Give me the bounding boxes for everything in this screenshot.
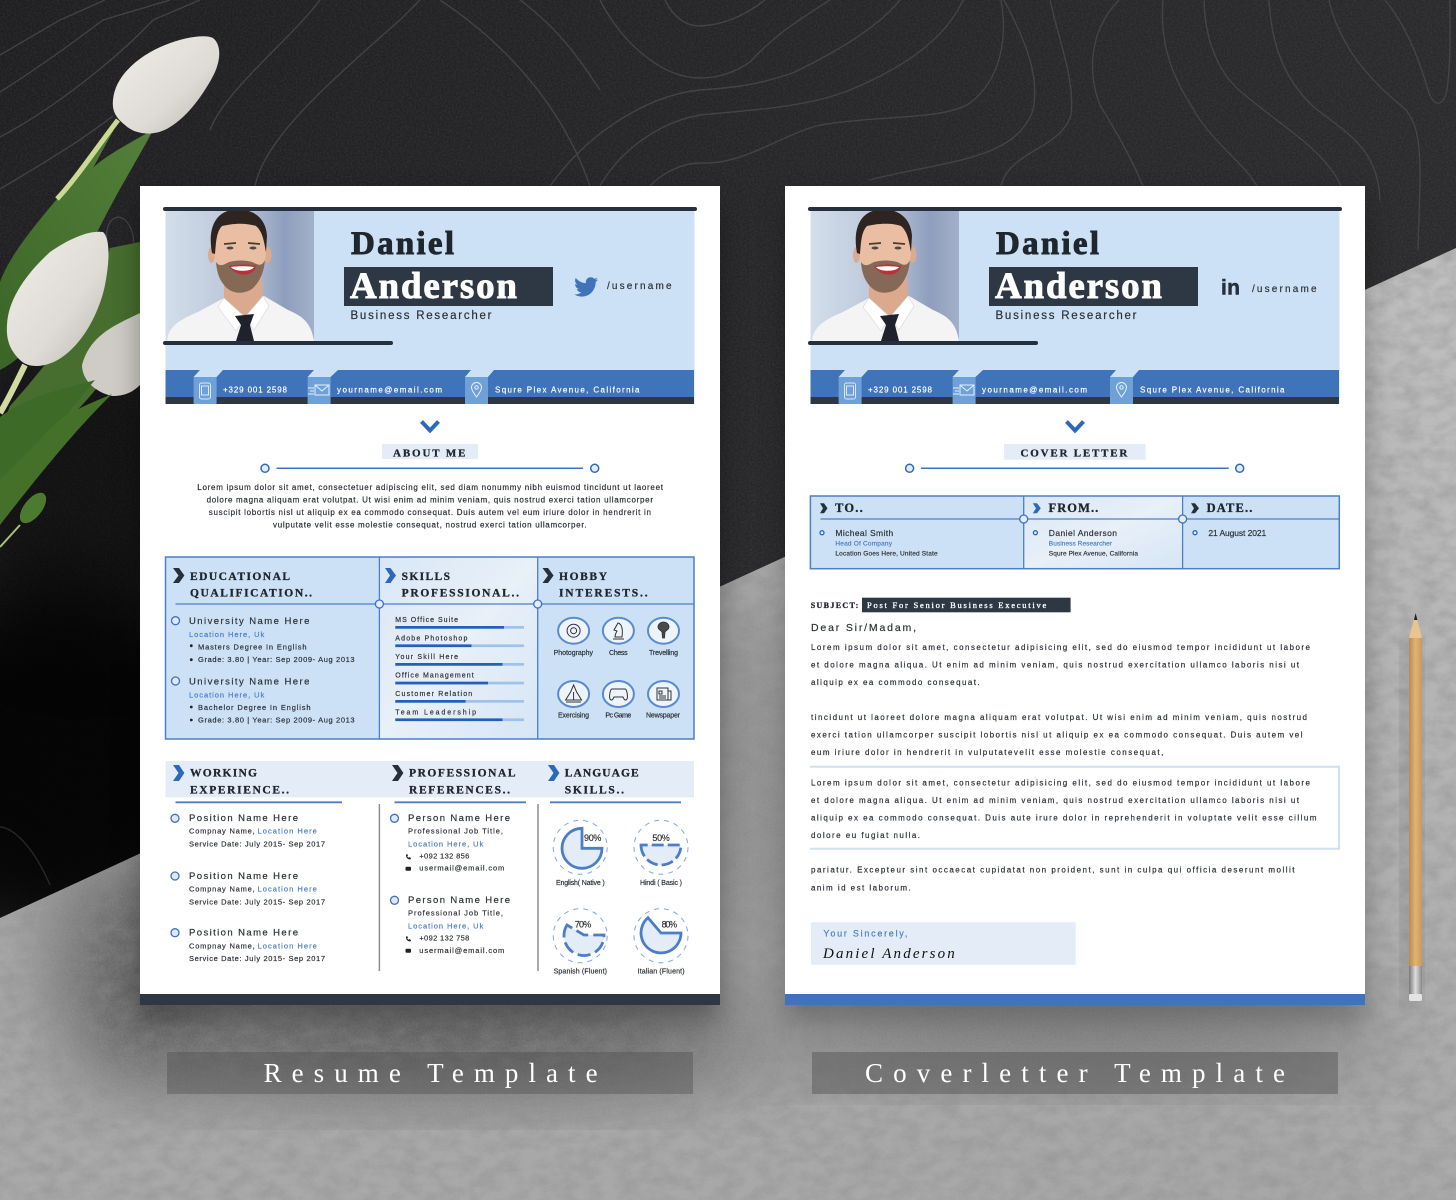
caption: resume template: Resume Template — [264, 1058, 598, 1088]
column: to: Head Of Company — [835, 541, 893, 548]
gauge: english 90%: English( Native ) — [556, 880, 605, 887]
section heading: skills: SKILLS — [402, 571, 450, 583]
job entry 3: Location Here — [258, 941, 317, 950]
about me paragraph: suscipit lobortis nisl ut aliquip ex ea commodo consequat. Duis autem vel eum iriure dolor in hendrerit in — [209, 508, 651, 517]
caption: resume template — [167, 1052, 693, 1094]
job entry 1: Compnay Name, — [189, 827, 255, 836]
contact ribbon — [166, 370, 694, 404]
paragraph 2: eum iriure dolor in hendrerit in vulputatevelit esse molestie consequat, — [811, 748, 1163, 757]
column: educational qualification — [172, 568, 355, 724]
column: from: Daniel Anderson — [1049, 528, 1117, 538]
icon: mail — [953, 385, 974, 395]
job title: Business Researcher — [996, 310, 1137, 322]
column: to — [820, 501, 938, 557]
job entry 2 — [171, 871, 325, 906]
heading: about me: ABOUT ME — [393, 448, 466, 460]
column: working experience — [171, 765, 325, 963]
about me section — [197, 422, 664, 530]
hobby: exercising — [558, 681, 589, 720]
column: date: DATE.. — [1207, 501, 1252, 515]
gauge: hindi 50%: 50% — [652, 833, 670, 843]
gauge: spanish 70%: 70% — [575, 920, 591, 930]
about me paragraph: dolore magna aliquam erat volutpat. Ut wisi enim ad minim veniam, quis nostrud exerci tation ullamcorper — [207, 495, 653, 504]
contact ribbon — [810, 370, 1339, 404]
education entry 2: Location Here, Uk — [189, 690, 265, 699]
gauge: spanish 70%: Spanish (Fluent) — [554, 968, 607, 975]
hobby: exercising: Exercising — [558, 713, 589, 720]
portrait photo — [166, 209, 314, 341]
divider with end nodes — [261, 464, 599, 472]
job entry 3 — [171, 928, 325, 963]
hobby: travelling — [648, 618, 679, 657]
social handle: /username — [607, 281, 672, 292]
section heading: education: QUALIFICATION.. — [190, 588, 312, 600]
job entry 1: Service Date: July 2015- Sep 2017 — [189, 839, 325, 848]
paragraph 2 — [811, 713, 1307, 757]
column: to: Location Goes Here, United State — [835, 550, 938, 557]
column: date — [1191, 501, 1266, 538]
gauge: italian 80% — [634, 909, 688, 975]
icon: phone — [844, 383, 856, 399]
cover letter heading block — [906, 422, 1244, 472]
job entry 3: Position Name Here — [189, 928, 298, 939]
paragraph 4: anim id est laborum. — [811, 883, 911, 892]
column: from: Squre Plex Avenue, California — [1049, 550, 1138, 557]
reference entry 1: Person Name Here — [408, 813, 510, 824]
education entry 1: Grade: 3.80 | Year: Sep 2009- Aug 2013 — [198, 655, 355, 664]
education entry 1: University Name Here — [189, 616, 309, 627]
reference entry 1: Location Here, Uk — [408, 839, 484, 848]
job entry 3: Compnay Name, — [189, 941, 255, 950]
job entry 1: Location Here — [258, 827, 317, 836]
highlighted paragraph: dolore eu fugiat nulla. — [811, 831, 920, 840]
icon: location pin — [472, 382, 482, 397]
hobby: newspaper — [646, 681, 681, 720]
pencil — [1404, 613, 1422, 1001]
reference entry 1: Professional Job Title, — [408, 827, 503, 836]
section heading: references — [392, 765, 516, 796]
highlighted paragraph: aliquip ex ea commodo consequat. Duis aute irure dolor in reprehenderit in voluptate velit esse cillum — [811, 813, 1317, 822]
paragraph 1 — [811, 643, 1311, 687]
caption: coverletter template — [812, 1052, 1338, 1094]
skill bars: MS Office Suite — [395, 617, 458, 624]
education entry 1: Location Here, Uk — [189, 630, 265, 639]
hobby: travelling: Trevelling — [649, 650, 678, 657]
section heading: hobbies: HOBBY — [559, 571, 608, 583]
skill bars: Customer Relation — [395, 691, 472, 698]
education entry 2 — [172, 677, 355, 724]
social handle: /username — [1252, 284, 1317, 295]
job entry 1: Position Name Here — [189, 813, 298, 824]
column: professional skills — [385, 568, 524, 721]
section heading: education — [173, 568, 312, 600]
about me paragraph: Lorem ipsum dolor sit amet, consectetuer adipiscing elit, sed diam nonummy nibh euismod tincidunt ut laoreet — [197, 483, 664, 492]
name box: Anderson: Anderson — [350, 266, 517, 307]
address: Squre Plex Avenue, California — [495, 386, 640, 394]
paragraph 2: tincidunt ut laoreet dolore magna aliquam erat volutpat. Ut wisi enim ad minim veniam, quis nostrud — [811, 713, 1307, 722]
resume footer strip — [140, 994, 720, 1005]
gauge: spanish 70% — [553, 909, 607, 975]
heading: about me — [382, 444, 478, 460]
job entry 1 — [171, 813, 325, 848]
reference entry 1 — [390, 813, 510, 873]
column: hobby interests — [542, 568, 681, 720]
section heading: hobbies: INTERESTS.. — [559, 588, 648, 600]
icon: location pin — [1116, 382, 1126, 397]
subject line: Post For Senior Business Executive — [867, 600, 1047, 610]
signature block — [811, 922, 1076, 965]
education entry 1: Masters Degree In English — [198, 642, 306, 651]
cover letter header — [808, 207, 1342, 404]
job title: Business Researcher — [350, 310, 492, 322]
skill bars — [395, 617, 524, 721]
divider with end nodes — [906, 464, 1244, 472]
cover letter footer strip — [785, 994, 1365, 1005]
icon: chevron down — [422, 422, 438, 430]
gauge: english 90%: 90% — [584, 833, 601, 843]
paragraph 1: et dolore magna aliqua. Ut enim ad minim veniam, quis nostrud exercitation ullamco laboris nisi ut — [811, 661, 1300, 670]
job entry 2: Position Name Here — [189, 871, 298, 882]
name: Daniel: Daniel — [351, 226, 454, 262]
hobby: photography — [554, 618, 594, 657]
column: to: Micheal Smith — [835, 528, 893, 538]
section heading: references: REFERENCES.. — [409, 784, 510, 796]
hobby: chess — [603, 618, 634, 657]
icon: phone — [200, 383, 210, 399]
section heading: references: PROFESSIONAL — [409, 768, 516, 780]
name box: Anderson: Anderson — [995, 266, 1162, 307]
column: to: TO.. — [835, 501, 863, 515]
gauge: italian 80%: Italian (Fluent) — [638, 968, 685, 975]
phone number: +329 001 2598 — [868, 386, 933, 394]
education entry 2: Bachelor Degree In English — [198, 703, 310, 712]
section heading: skills: PROFESSIONAL.. — [402, 588, 519, 600]
section heading: education: EDUCATIONAL — [190, 571, 290, 583]
section heading: hobbies — [542, 568, 648, 600]
column: professional references — [390, 765, 516, 955]
portrait photo — [811, 209, 959, 341]
phone number: +329 001 2598 — [223, 386, 288, 394]
reference entry 2: Person Name Here — [408, 895, 510, 906]
subject line — [811, 598, 1071, 612]
job entry 2: Service Date: July 2015- Sep 2017 — [189, 897, 325, 906]
skill bars: Office Management — [395, 673, 474, 680]
caption: coverletter template: Coverletter Template — [865, 1058, 1285, 1088]
section heading: experience: WORKING — [190, 768, 257, 780]
education entry 2: University Name Here — [189, 677, 309, 688]
highlighted paragraph: Lorem ipsum dolor sit amet, consectetur adipisicing elit, sed do eiusmod tempor incididunt ut labore — [811, 778, 1311, 787]
column: language skills — [548, 765, 688, 975]
signature block: Daniel Anderson — [822, 946, 955, 962]
page shadows — [140, 200, 1365, 1020]
background: grey concrete surface — [0, 248, 1456, 1200]
job entry 2: Compnay Name, — [189, 885, 255, 894]
paragraph 1: Lorem ipsum dolor sit amet, consectetur adipisicing elit, sed do eiusmod tempor incididunt ut labore — [811, 643, 1311, 652]
hobby: photography: Photography — [554, 650, 594, 657]
hobby: newspaper: Newspaper — [646, 713, 681, 720]
section heading: languages: LANGUAGE — [565, 768, 639, 780]
reference entry 2: usermail@email.com — [419, 946, 504, 955]
section heading: experience — [173, 765, 289, 796]
gauge: italian 80%: 80% — [662, 920, 677, 930]
panel: experience, references, languages — [166, 761, 694, 975]
salutation: Dear Sir/Madam, — [811, 622, 916, 634]
icon: mail — [308, 385, 329, 395]
section heading: skills — [385, 568, 519, 600]
gauge: hindi 50% — [634, 820, 688, 887]
email: yourname@email.com — [337, 386, 442, 394]
paragraph 2: exerci tation ullamcorper suscipit lobortis nisl ut aliquip ex ea commodo consequat. Duis autem vel — [811, 731, 1303, 740]
panel: education, skills, hobbies — [166, 557, 694, 739]
section heading: languages — [548, 765, 639, 796]
job entry 3: Service Date: July 2015- Sep 2017 — [189, 954, 325, 963]
reference entry 2: Professional Job Title, — [408, 909, 503, 918]
icon: twitter bird — [574, 277, 598, 297]
reference entry 1: +092 132 856 — [419, 851, 469, 860]
email: yourname@email.com — [982, 386, 1087, 394]
reference entry 2: Location Here, Uk — [408, 921, 484, 930]
reference entry 1: usermail@email.com — [419, 864, 504, 873]
section heading: languages: SKILLS.. — [565, 784, 624, 796]
signature block: Your Sincerely, — [823, 928, 907, 938]
icon: chevron down — [1066, 422, 1084, 430]
panel: resume page — [140, 186, 720, 1005]
education entry 1 — [172, 616, 355, 664]
reference entry 2 — [390, 895, 510, 955]
column: date: 21 August 2021 — [1208, 528, 1266, 538]
hobby: pc game — [603, 681, 634, 720]
gauge: hindi 50%: Hindi ( Basic ) — [640, 880, 682, 887]
subject line: SUBJECT: — [811, 601, 858, 610]
skill bars: Adobe Photoshop — [395, 635, 467, 642]
paragraph 1: aliquip ex ea commodo consequat. — [811, 678, 980, 687]
address: Squre Plex Avenue, California — [1140, 386, 1285, 394]
heading: cover letter — [1004, 444, 1146, 460]
section heading: experience: EXPERIENCE.. — [190, 784, 289, 796]
skill bars: Your Skill Here — [395, 654, 458, 661]
column: from: Business Researcher — [1049, 541, 1113, 548]
paragraph 4 — [811, 866, 1295, 892]
highlighted paragraph — [810, 767, 1339, 849]
education entry 2: Grade: 3.80 | Year: Sep 2009- Aug 2013 — [198, 715, 355, 724]
hobby: chess: Chess — [609, 650, 628, 657]
name: Daniel: Daniel — [996, 226, 1099, 262]
column: from: FROM.. — [1048, 501, 1098, 515]
resume header — [163, 207, 697, 404]
highlighted paragraph: et dolore magna aliqua. Ut enim ad minim veniam, quis nostrud exercitation ullamco laboris nisi ut — [811, 796, 1300, 805]
panel: cover letter page — [785, 186, 1365, 1005]
paragraph 4: pariatur. Excepteur sint occaecat cupidatat non proident, sunt in culpa qui officia deserunt mollit — [811, 866, 1295, 875]
skill bars: Team Leadership — [395, 710, 476, 717]
about me paragraph — [197, 483, 664, 530]
heading: cover letter: COVER LETTER — [1020, 448, 1128, 460]
reference entry 2: +092 132 758 — [419, 933, 469, 942]
letter body — [810, 643, 1339, 892]
panel: to, from, date — [810, 496, 1339, 569]
about me paragraph: vulputate velit esse molestie consequat, nostrud exerci tation ullamcorper. — [273, 520, 587, 530]
column: from — [1033, 501, 1138, 557]
hobby: pc game: Pc Game — [605, 713, 631, 720]
illustration: white tulips — [0, 36, 219, 547]
icon: linkedin: in — [1221, 276, 1240, 300]
gauge: english 90% — [553, 820, 607, 887]
job entry 2: Location Here — [258, 885, 317, 894]
